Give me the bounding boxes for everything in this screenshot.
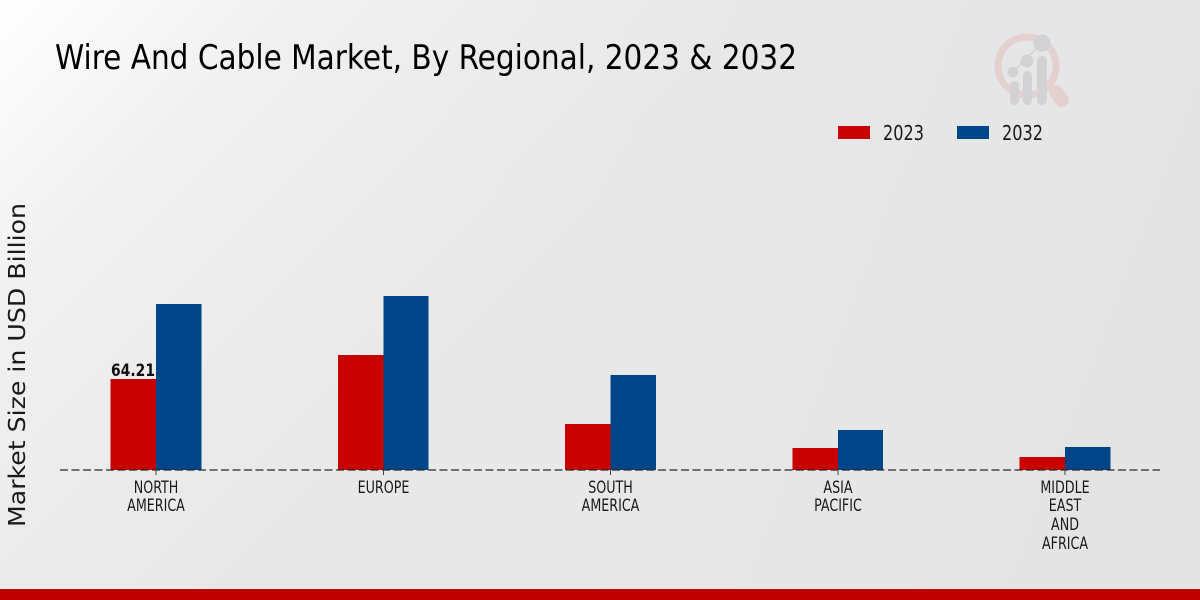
label: Asia Pacific: PACIFIC [814, 496, 862, 515]
icon: magnifier logo watermark [998, 34, 1062, 105]
label: South America: SOUTH [588, 478, 633, 497]
label: Asia Pacific: ASIA [823, 478, 853, 497]
bars: South America [565, 375, 656, 470]
x-axis labels [127, 478, 1090, 553]
legend [838, 121, 1043, 145]
legend item: 2032 [957, 121, 1043, 145]
bars: North America [110, 304, 202, 470]
label: Middle East and Africa: EAST [1049, 496, 1082, 515]
y-axis title: Market Size in USD Billion [3, 203, 31, 527]
label: South America: AMERICA [582, 496, 640, 515]
footer bar [0, 589, 1200, 600]
legend item: 2023 [838, 121, 924, 145]
legend item: 2032: 2032 [1002, 121, 1043, 145]
bars: Europe [338, 296, 428, 470]
legend item: 2023: 2023 [883, 121, 924, 145]
label: Middle East and Africa: MIDDLE [1040, 478, 1090, 497]
label: Europe: EUROPE [358, 478, 409, 497]
bars: Middle East and Africa [1020, 447, 1110, 470]
title: Wire And Cable Market, By Regional, 2023 & 2032 [55, 38, 797, 78]
dashed baseline [60, 469, 1160, 471]
bar chart [60, 296, 1160, 475]
bars: Asia Pacific [792, 430, 883, 470]
label: North America: NORTH [134, 478, 178, 497]
data label: 64.21: 64.21 [111, 361, 155, 380]
label: North America: AMERICA [127, 496, 185, 515]
label: Middle East and Africa: AND [1051, 515, 1079, 534]
label: Middle East and Africa: AFRICA [1042, 534, 1088, 553]
